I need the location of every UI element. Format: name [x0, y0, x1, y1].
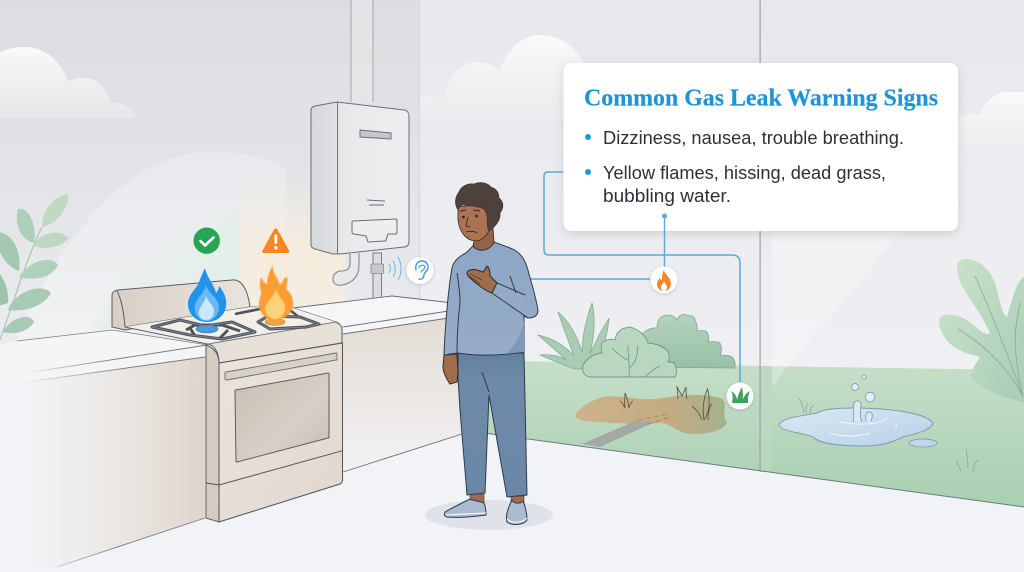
bullet: environmental signs: bubbling water. [603, 186, 731, 206]
soft hill light on kitchen wall [17, 152, 288, 345]
face [458, 203, 491, 241]
window post [760, 0, 761, 470]
heater display [360, 130, 391, 139]
icon: grass badge [726, 382, 754, 410]
dead grass patch [575, 387, 727, 447]
lowered hand [443, 354, 458, 384]
bullet: symptoms: Dizziness, nausea, trouble breathing. [603, 128, 904, 148]
window sill line [470, 431, 1024, 507]
icon: flame badge [650, 266, 678, 294]
burner: yellow-orange flame [259, 265, 293, 326]
neck [473, 228, 494, 250]
heater control box [352, 219, 397, 242]
sound waves from leak [389, 257, 401, 280]
pipes below heater [333, 253, 384, 301]
bullet: environmental signs [585, 163, 886, 206]
buried gas pipe [582, 421, 655, 447]
stove grate: left [152, 320, 255, 339]
stove grate: back [235, 308, 300, 318]
front bush [583, 327, 676, 377]
callout panel: warning signs [564, 63, 958, 231]
green glow behind blue flame [90, 205, 240, 330]
callout stem to flame badge [662, 214, 667, 268]
orange glow behind yellow flame [240, 175, 345, 315]
sweater [444, 242, 538, 355]
right shoe [506, 500, 527, 524]
water heater [311, 102, 409, 254]
callout title: Common Gas Leak Warning Signs [584, 84, 938, 112]
cooktop [125, 307, 342, 363]
icon: ear badge [406, 257, 434, 284]
window post band [760, 366, 772, 472]
background wall: kitchen [0, 0, 421, 420]
oven side panel [206, 345, 219, 522]
plant: right large leaf [939, 259, 1024, 402]
oven front [219, 343, 342, 522]
icon: warning triangle [262, 228, 289, 253]
plant: fern and bushes [538, 303, 735, 377]
connector lines from callout [530, 170, 740, 382]
kitchen wall edge [418, 0, 420, 300]
backyard ground: grass seen through window [470, 360, 1024, 507]
gas stove with oven [112, 280, 342, 522]
left shoe [444, 499, 486, 517]
cloud: center [420, 35, 620, 120]
oven handle [225, 353, 337, 380]
bubbling water puddle [779, 375, 978, 472]
back bush [620, 315, 735, 368]
hair [455, 183, 503, 230]
left counter and cabinet [0, 330, 208, 572]
pants [458, 353, 527, 497]
fern [538, 303, 609, 369]
dry grass tufts [620, 387, 712, 420]
glass window reflections [772, 232, 900, 387]
ankles [470, 494, 524, 504]
vent pipes above water heater [351, 0, 373, 103]
cloud: right [958, 92, 1024, 153]
plant: left [0, 194, 68, 340]
chest hand [467, 266, 497, 293]
background wall: exterior window [420, 0, 1024, 440]
ground shadow [425, 500, 553, 530]
oven window [235, 373, 329, 462]
backsplash [112, 280, 250, 330]
burner: blue flame [188, 268, 226, 333]
oven drawer line [206, 451, 342, 485]
stove grate: right [258, 316, 319, 329]
cloud: left [0, 47, 136, 118]
bullet: environmental signs: Yellow flames, hissing, dead grass, [603, 163, 886, 183]
person with hand on chest [425, 183, 553, 530]
icon: safe flame check [194, 228, 220, 254]
floor [0, 420, 1024, 572]
right counter and cabinet [293, 296, 470, 472]
